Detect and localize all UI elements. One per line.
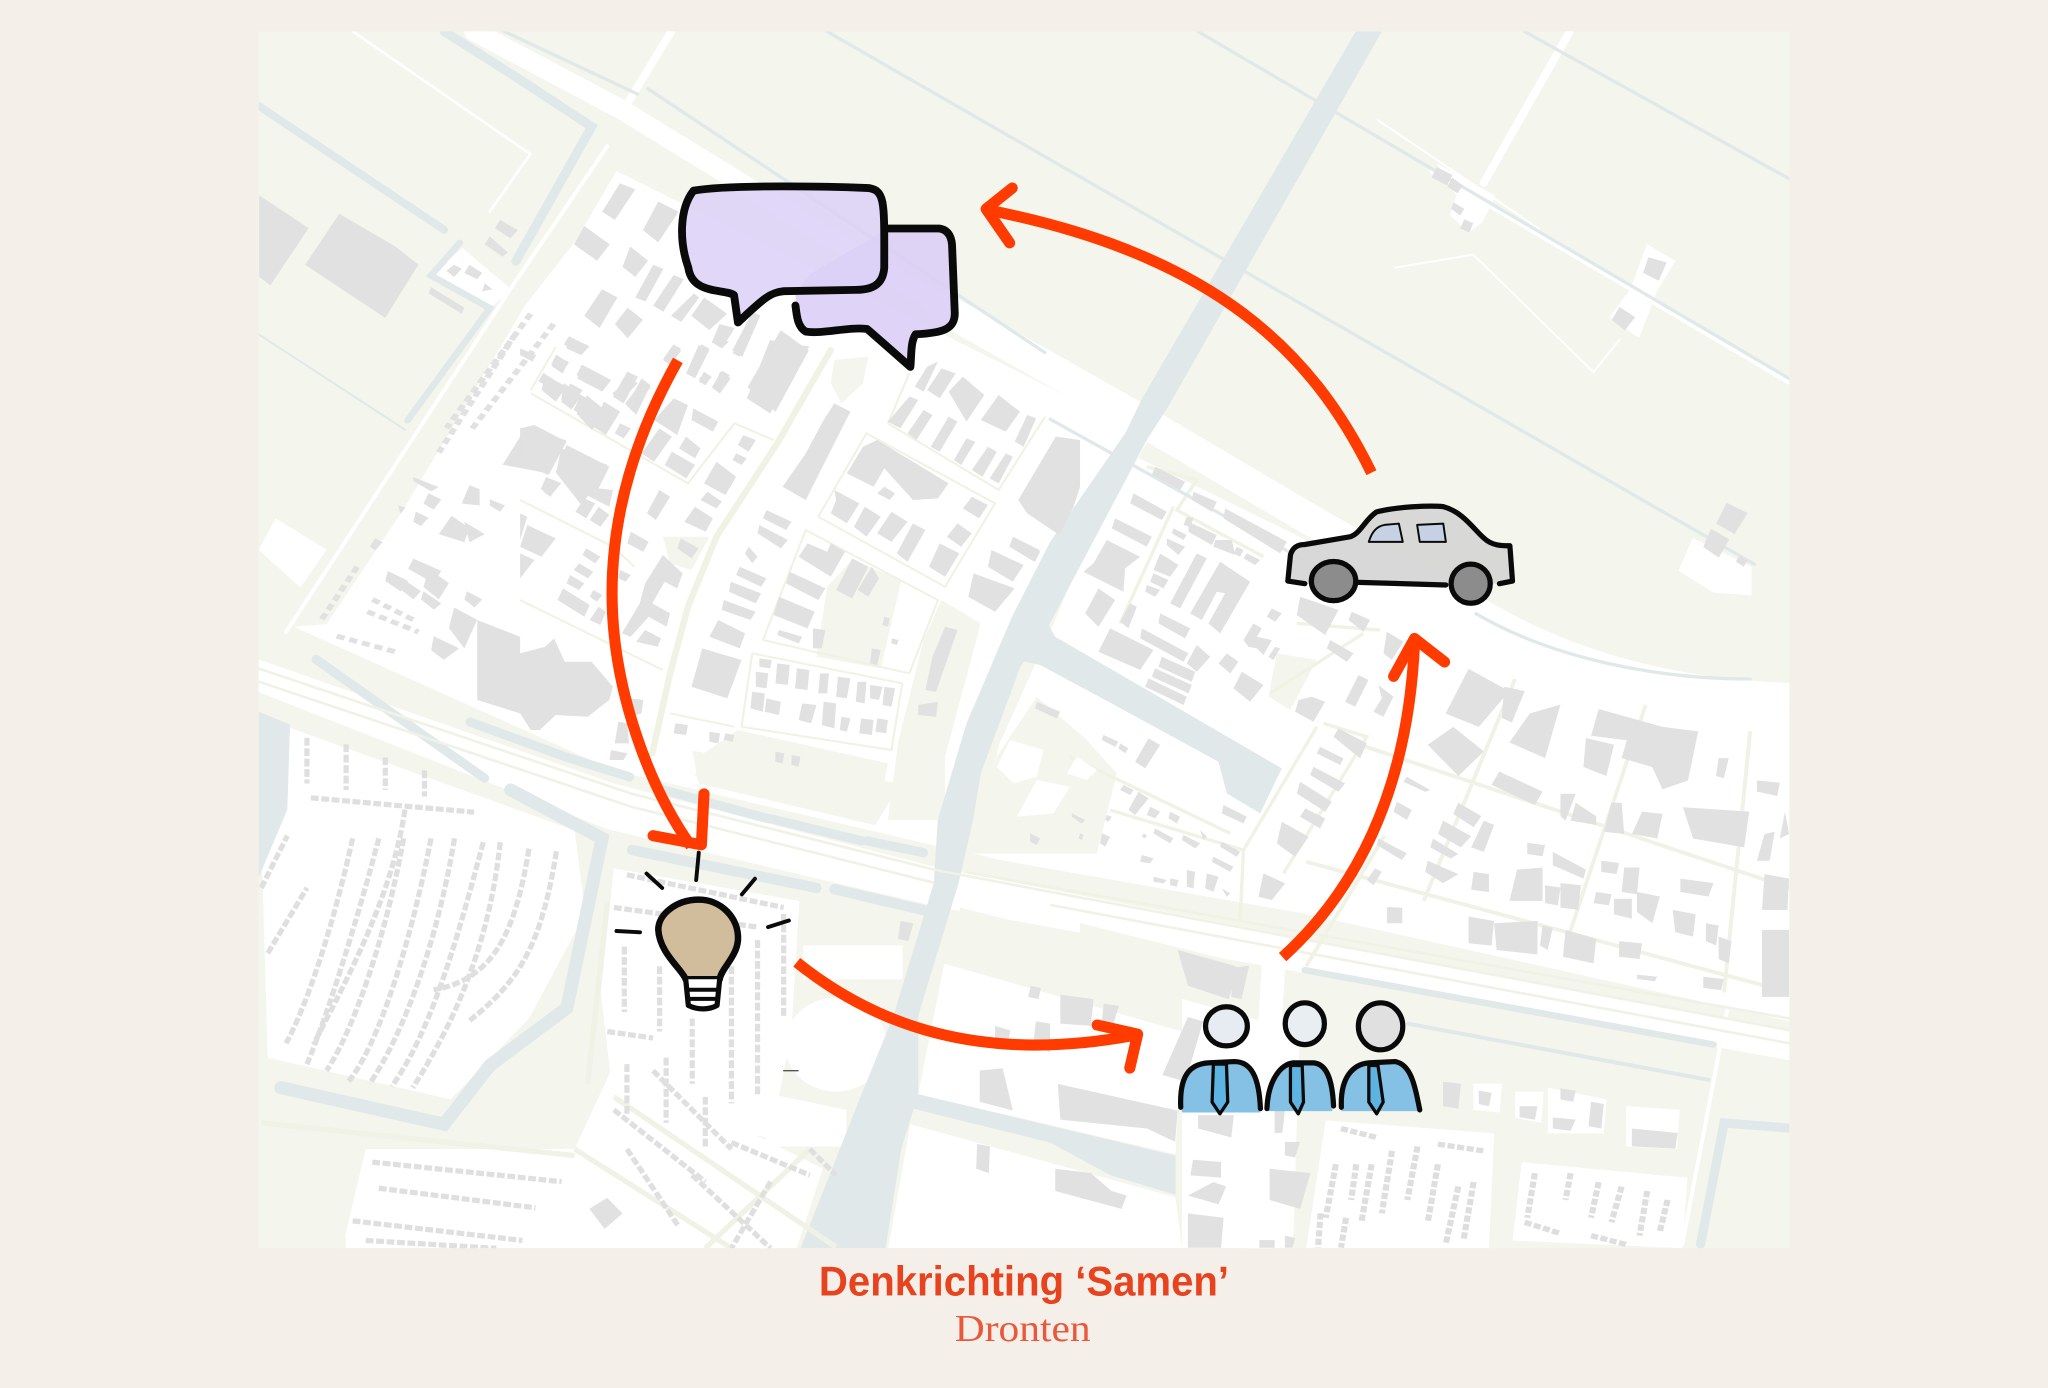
pale land between blocks: [342, 751, 1218, 1248]
arrow: people to car: [1283, 639, 1445, 957]
residential rows: [261, 738, 836, 1248]
rail and road lines: [259, 669, 1789, 1248]
icon: light bulb: [616, 853, 798, 1071]
buildings: east block: [1030, 467, 1430, 920]
caption title: Denkrichting ‘Samen’: [819, 1257, 1229, 1304]
pale land, central block: [520, 347, 1045, 820]
person 2: [1267, 1003, 1334, 1114]
pale land, east block: [967, 467, 1380, 920]
arrow: car to speech bubbles: [986, 188, 1371, 473]
icon: car: [1288, 506, 1512, 603]
icon: three people: [1179, 1003, 1420, 1114]
arrow: speech bubbles to idea: [612, 360, 704, 846]
buildings: south-west extras: [589, 921, 1050, 1229]
arrow: idea to people: [797, 962, 1138, 1068]
main roads: [286, 31, 1789, 1244]
white urban blocks: [259, 163, 1789, 1248]
water: canals and ditches: [259, 31, 1382, 1248]
person 1: [1179, 1007, 1260, 1114]
buildings: central block: [477, 340, 1080, 767]
panel: map of Dronten: [259, 31, 1789, 1248]
buildings: south-east area: [1055, 669, 1789, 1248]
caption subtitle: Dronten: [955, 1308, 1091, 1350]
buildings: north-west block: [259, 183, 809, 660]
person 3: [1341, 1003, 1420, 1114]
water: harbour branch: [1024, 626, 1282, 814]
buildings: farms: [1432, 167, 1748, 567]
icon: speech bubbles: [682, 186, 955, 367]
infographic canvas: [258, 32, 1790, 1342]
